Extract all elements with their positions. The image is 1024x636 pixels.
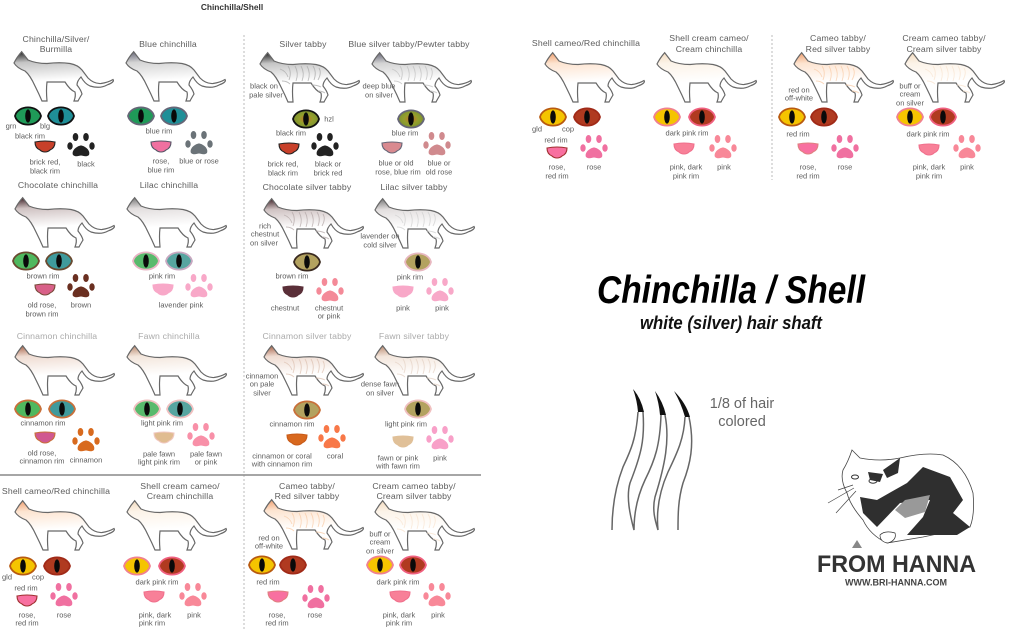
labels: cinnamon — [246, 372, 278, 380]
labels — [26, 272, 91, 318]
labels: pink rim — [149, 272, 175, 280]
labels: red rim — [544, 136, 568, 144]
eye: tan — [294, 253, 320, 271]
panel: Lilac chinchilla — [127, 180, 226, 310]
labels — [785, 86, 852, 180]
main title: Chinchilla / Shell — [597, 269, 866, 312]
labels: chestnut — [251, 230, 280, 238]
paw: rose — [831, 135, 859, 158]
labels: on silver — [365, 90, 393, 100]
panel: Fawn silver tabby: Fawn silver tabby — [379, 331, 450, 341]
panel: Cameo tabby (upper right): Red silver tabby — [806, 44, 871, 54]
labels: pale fawn — [190, 450, 222, 458]
labels: brown rim — [276, 272, 308, 280]
labels: rose, — [549, 162, 565, 172]
labels: on silver — [896, 98, 924, 108]
labels: rose, blue rim — [375, 168, 421, 176]
eye: tan — [294, 401, 320, 419]
paw: black — [311, 133, 339, 156]
labels: brick red — [314, 168, 342, 178]
panel: Lilac silver tabby — [360, 182, 474, 312]
diagram: hair shafts with dark tips — [612, 389, 692, 530]
nose: rose — [798, 143, 818, 154]
labels — [255, 534, 322, 628]
panel: Cream cameo tabby (upper right) — [896, 33, 1004, 180]
labels: rich — [259, 222, 271, 230]
labels: black — [77, 160, 95, 168]
cat: shell cameo — [15, 501, 114, 550]
labels: pink rim — [916, 172, 942, 180]
panel: Cream cameo tabby (lower): Cream silver tabby — [376, 491, 452, 501]
labels: pale silver — [249, 90, 283, 100]
labels: lavender on — [360, 232, 400, 240]
labels: red on — [258, 534, 280, 542]
labels: dense fawn — [361, 380, 399, 388]
labels: pink rim — [139, 618, 165, 628]
labels: pink, dark — [670, 162, 703, 172]
cat: cream cameo tabby — [905, 53, 1004, 102]
labels — [361, 380, 447, 470]
eyes: gold and copper — [10, 557, 70, 575]
cat: blue silver tabby — [372, 53, 471, 102]
labels — [146, 126, 219, 174]
nose: old rose — [35, 284, 55, 295]
labels: brick red, — [268, 160, 298, 168]
panel: Chocolate chinchilla: Chocolate chinchilla — [18, 180, 98, 190]
cat: shell cream — [657, 53, 756, 102]
nose: rose — [17, 595, 37, 606]
labels: pink, dark — [383, 610, 416, 620]
panel: Cameo tabby (upper right) — [779, 33, 893, 180]
nose: cinnamon — [287, 434, 307, 445]
labels: dark pink rim — [136, 578, 178, 586]
eyes: green and blue-green — [128, 107, 187, 125]
labels — [6, 122, 95, 176]
paw: rose — [580, 135, 608, 158]
nose: chestnut — [283, 286, 303, 297]
panel: Shell cameo/Red chinchilla (lower) — [2, 486, 114, 628]
eyes: gold and copper — [779, 108, 837, 126]
labels: blue or rose — [179, 156, 219, 166]
paw: old rose — [423, 132, 451, 155]
labels: fawn or pink — [378, 454, 418, 462]
panel: Chocolate silver tabby — [250, 182, 363, 320]
labels: gld — [532, 124, 542, 134]
panel: Blue chinchilla — [126, 39, 225, 174]
labels: old rose, — [28, 448, 56, 458]
labels: rose, — [153, 156, 169, 166]
labels — [666, 128, 731, 180]
nose: pink — [393, 286, 413, 297]
labels: pink rim — [397, 272, 423, 282]
labels: deep blue — [363, 82, 395, 90]
labels: black rim — [30, 166, 60, 176]
labels: rose, — [269, 610, 285, 620]
nose: pale fawn — [154, 432, 174, 443]
labels — [363, 82, 452, 176]
panel: Fawn silver tabby — [361, 331, 474, 470]
labels: red rim — [786, 130, 810, 138]
cat: cinnamon tipped — [15, 346, 114, 395]
labels: brown rim — [26, 310, 58, 318]
labels: pink — [431, 610, 445, 620]
labels: pink, dark — [139, 610, 172, 620]
nose: lavender pink — [153, 284, 173, 295]
labels — [246, 372, 343, 468]
logo: FROM HANNA: FROM HANNA — [817, 551, 976, 578]
eye: hazel — [293, 110, 319, 128]
paw: pink — [426, 278, 454, 301]
labels: pale fawn — [143, 450, 175, 458]
labels: red rim — [14, 584, 38, 592]
labels: pink — [960, 162, 974, 172]
labels: off-white — [785, 94, 813, 102]
eyes: gold and copper — [367, 556, 426, 574]
labels: blue rim — [392, 128, 418, 138]
labels: blue rim — [146, 126, 172, 136]
panel: Shell cameo/Red chinchilla (upper right): Shell cameo/Red chinchilla — [532, 38, 640, 48]
labels: on silver — [250, 238, 278, 248]
labels: blue or old — [378, 158, 414, 168]
panel: Cinnamon chinchilla — [15, 331, 114, 466]
panel: Shell cream cameo (upper right) — [654, 33, 756, 180]
paw: blue — [185, 131, 213, 154]
labels: grn — [6, 122, 16, 130]
labels: dark pink rim — [666, 128, 708, 138]
cat: lilac tipped — [127, 198, 226, 247]
labels: black rim — [268, 168, 298, 178]
cat: silver tabby — [260, 53, 359, 102]
labels: on silver — [366, 388, 394, 398]
labels: off-white — [255, 542, 283, 550]
nose: pink — [144, 591, 164, 602]
labels: pink rim — [386, 618, 412, 628]
labels: cinnamon — [70, 456, 102, 464]
panel: Chinchilla/Silver/Burmilla: Chinchilla/Silver/ — [23, 34, 90, 44]
labels — [2, 572, 71, 628]
cat: cinnamon silver tabby — [264, 346, 363, 395]
panel: Cinnamon chinchilla: Cinnamon chinchilla — [17, 331, 97, 341]
panel: Cinnamon silver tabby: Cinnamon silver tabby — [262, 331, 352, 341]
panel: Lilac silver tabby: Lilac silver tabby — [381, 182, 448, 192]
labels: pink, dark — [913, 162, 946, 172]
nose: brick red — [35, 141, 55, 152]
paw: pink — [179, 583, 207, 606]
nose: pink — [919, 144, 939, 155]
nose: fawn — [393, 436, 413, 447]
paw: pink — [423, 583, 451, 606]
panel: Cream cameo tabby (lower) — [366, 481, 474, 628]
eye: tan — [405, 400, 431, 418]
labels: light pink rim — [138, 458, 180, 466]
panel: Shell cameo/Red chinchilla (upper right) — [532, 38, 644, 180]
labels — [19, 418, 102, 466]
eye: tan — [405, 253, 431, 271]
labels: red on — [788, 86, 810, 94]
labels — [136, 578, 201, 628]
panel: Silver tabby: Silver tabby — [279, 39, 327, 49]
subtitle: white (silver) hair shaft — [640, 313, 823, 333]
labels — [249, 82, 342, 178]
cat: chocolate silver tabby — [264, 199, 363, 248]
cat: lilac silver tabby — [375, 199, 474, 248]
labels: old rose — [426, 168, 452, 176]
paw: pink — [426, 426, 454, 449]
paw: coral — [318, 425, 346, 448]
labels: brick red, — [30, 158, 60, 166]
labels: cop — [32, 572, 44, 582]
labels: coral — [327, 452, 343, 460]
cat: cameo tabby — [264, 500, 363, 549]
panel: Silver tabby — [249, 39, 359, 178]
cat: shell cream — [127, 501, 226, 550]
eyes: gold and copper — [249, 556, 306, 574]
labels — [149, 272, 204, 310]
labels: dark pink rim — [377, 578, 419, 586]
panel: Shell cream cameo (lower): Shell cream cameo/ — [140, 481, 220, 491]
labels: pink — [433, 454, 447, 462]
labels: black on — [250, 82, 278, 90]
panel: Shell cream cameo (upper right): Shell cream cameo/ — [669, 33, 749, 43]
panel: Cream cameo tabby (upper right): Cream cameo tabby/ — [902, 33, 986, 43]
panel: Cameo tabby (lower): Red silver tabby — [275, 491, 340, 501]
labels — [138, 418, 222, 466]
nose: pink — [390, 591, 410, 602]
labels: with cinnamon rim — [251, 460, 312, 468]
labels: rose — [587, 162, 601, 172]
nose: pink — [674, 143, 694, 154]
eyes: gold and copper — [540, 108, 600, 126]
panel: Blue chinchilla: Blue chinchilla — [139, 39, 197, 49]
panel: Shell cream cameo (lower) — [124, 481, 226, 628]
cat: cream cameo tabby — [375, 501, 474, 550]
nose: old rose — [382, 142, 402, 153]
hair caption: 1/8 of hair — [710, 396, 774, 412]
labels: black rim — [15, 132, 45, 140]
labels: chestnut — [315, 304, 344, 312]
labels: black or — [315, 160, 342, 168]
labels: pink rim — [673, 172, 699, 180]
labels: with fawn rim — [375, 462, 420, 470]
labels — [250, 222, 344, 320]
paw: pink — [187, 423, 215, 446]
paw: brown — [67, 274, 95, 297]
labels: red rim — [545, 172, 569, 180]
labels: pink — [435, 304, 449, 312]
eyes: gold and copper — [897, 108, 956, 126]
labels: light pink rim — [141, 418, 183, 428]
labels: cinnamon rim — [19, 456, 65, 466]
labels: brown — [71, 300, 91, 310]
hair caption — [710, 396, 774, 430]
panel: Cameo tabby (upper right): Cameo tabby/ — [810, 33, 866, 43]
panel: Blue silver tabby: Blue silver tabby/Pewter tabby — [348, 39, 470, 49]
paw: pink — [953, 135, 981, 158]
panel: Shell cream cameo (upper right): Cream chinchilla — [676, 44, 742, 54]
cat: black tipped — [14, 52, 113, 101]
eyes — [15, 400, 75, 418]
eye: hazel — [398, 110, 424, 128]
panel: Chinchilla/Silver/Burmilla — [6, 34, 113, 176]
labels: cream — [900, 90, 920, 98]
labels: rose — [57, 610, 71, 620]
paw: cinnamon — [72, 428, 100, 451]
panel: Chinchilla/Silver/Burmilla: Burmilla — [40, 44, 72, 54]
labels: light pink rim — [385, 420, 427, 428]
labels: on pale — [250, 380, 274, 388]
labels: on silver — [366, 546, 394, 556]
panel: Fawn chinchilla: Fawn chinchilla — [138, 331, 200, 341]
labels: cinnamon or coral — [252, 452, 312, 460]
labels: pink — [396, 304, 410, 312]
labels: blue rim — [148, 166, 174, 174]
nose: old rose — [35, 432, 55, 443]
nose: rose — [547, 147, 567, 158]
panel: Lilac chinchilla: Lilac chinchilla — [140, 180, 198, 190]
panel: Fawn chinchilla — [127, 331, 226, 466]
nose: rose — [268, 591, 288, 602]
paw: rose — [50, 583, 78, 606]
labels: blue or — [428, 158, 451, 168]
panel: Chocolate silver tabby: Chocolate silver tabby — [263, 182, 352, 192]
labels: rose, — [800, 162, 816, 172]
labels: chestnut — [271, 304, 300, 312]
cat: blue tipped — [126, 52, 225, 101]
paw: rose — [302, 585, 330, 608]
paw: black — [67, 133, 95, 156]
eyes: gold and copper — [124, 557, 185, 575]
panel: Blue silver tabby — [348, 39, 471, 176]
labels: cream — [370, 538, 390, 546]
labels: black rim — [276, 128, 306, 138]
labels: buff or — [369, 530, 391, 538]
paw: pink — [709, 135, 737, 158]
logo: small triangle — [852, 540, 862, 548]
labels: red rim — [15, 618, 39, 628]
eyes — [133, 252, 192, 270]
panel: Cinnamon silver tabby — [246, 331, 363, 468]
logo: website: WWW.BRI-HANNA.COM — [845, 578, 947, 588]
nose: brick red — [279, 143, 299, 154]
labels: red rim — [256, 578, 280, 586]
labels: cold silver — [363, 240, 397, 250]
labels: pink — [717, 162, 731, 172]
cat: chocolate tipped — [15, 198, 114, 247]
labels: cinnamon rim — [20, 418, 66, 428]
labels: or pink — [318, 312, 341, 320]
panel: Chocolate chinchilla — [13, 180, 114, 318]
labels: cop — [562, 124, 574, 134]
labels: red rim — [796, 172, 820, 180]
top heading: Chinchilla/Shell — [201, 2, 263, 12]
paw: pink — [316, 278, 344, 301]
labels: old rose, — [28, 300, 56, 310]
labels: pink — [187, 610, 201, 620]
eyes: green and blue-green — [15, 107, 74, 125]
paw: lavender pink — [185, 274, 213, 297]
labels — [532, 124, 601, 180]
hair caption: colored — [718, 414, 766, 430]
labels: brown rim — [27, 272, 59, 280]
labels — [896, 82, 974, 180]
cat: cameo tabby — [794, 53, 893, 102]
labels: buff or — [899, 82, 921, 90]
labels: blg — [40, 122, 50, 130]
logo: cat illustration — [828, 450, 974, 543]
labels: rose, — [19, 610, 35, 620]
labels — [360, 232, 449, 312]
cat: fawn silver tabby — [375, 346, 474, 395]
labels: silver — [253, 388, 271, 398]
panel: Cream cameo tabby (upper right): Cream silver tabby — [906, 44, 982, 54]
nose: rose — [151, 141, 171, 152]
panel: Shell cameo/Red chinchilla (lower): Shell cameo/Red chinchilla — [2, 486, 110, 496]
labels: dark pink rim — [907, 130, 949, 138]
panel: Shell cream cameo (lower): Cream chinchilla — [147, 491, 213, 501]
labels: lavender pink — [159, 300, 204, 310]
eyes — [134, 400, 193, 418]
labels: hzl — [324, 114, 334, 124]
labels: gld — [2, 572, 12, 582]
labels: rose — [308, 610, 322, 620]
panel: Cream cameo tabby (lower): Cream cameo tabby/ — [372, 481, 456, 491]
cat: fawn tipped — [127, 346, 226, 395]
labels: or pink — [195, 458, 218, 466]
panel: Cameo tabby (lower): Cameo tabby/ — [279, 481, 335, 491]
eyes: gold and copper — [654, 108, 715, 126]
labels: red rim — [265, 618, 289, 628]
labels: rose — [838, 162, 852, 172]
cat: shell cameo — [545, 53, 644, 102]
panel: Cameo tabby (lower) — [249, 481, 363, 628]
eyes — [13, 252, 72, 270]
labels: cinnamon rim — [269, 420, 315, 428]
labels — [366, 530, 445, 628]
